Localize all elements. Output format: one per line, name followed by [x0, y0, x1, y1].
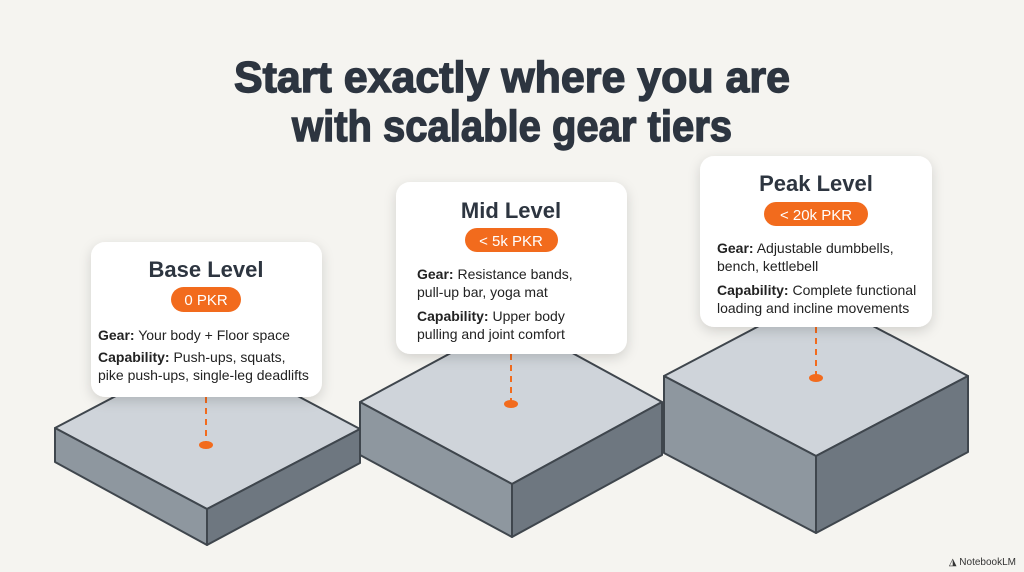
- connector: base: [199, 397, 213, 449]
- connector: mid: [504, 354, 518, 408]
- card: mid level: < 5k PKR: [479, 233, 543, 250]
- card: mid level: Gear: Resistance bands,: [417, 266, 573, 282]
- card: peak level: [700, 156, 932, 327]
- platform: base: [55, 348, 360, 545]
- title: with scalable gear tiers: [291, 102, 732, 151]
- connector: peak: [809, 327, 823, 382]
- card: mid level: Capability: Upper body: [417, 308, 565, 324]
- card: base level: pike push-ups, single-leg deadlifts: [98, 367, 309, 383]
- card: peak level: < 20k PKR: [780, 207, 852, 224]
- card: peak level: Capability: Complete functional: [717, 282, 916, 298]
- card: peak level: Gear: Adjustable dumbbells,: [717, 240, 894, 256]
- card: peak level: Peak Level: [759, 171, 873, 196]
- title: [234, 53, 790, 151]
- platform: mid: [360, 320, 662, 537]
- card: peak level: bench, kettlebell: [717, 258, 818, 274]
- card: base level: Gear: Your body + Floor space: [98, 327, 290, 343]
- card: peak level: loading and incline movements: [717, 300, 909, 316]
- title: Start exactly where you are: [234, 53, 790, 102]
- platform: peak: [664, 296, 968, 533]
- watermark: ◮ NotebookLM: [949, 557, 1016, 568]
- card: base level: Base Level: [149, 257, 263, 282]
- card: mid level: pull-up bar, yoga mat: [417, 284, 548, 300]
- card: mid level: Mid Level: [461, 198, 561, 223]
- card: base level: 0 PKR: [184, 292, 228, 309]
- card: base level: [91, 242, 322, 397]
- card: base level: Capability: Push-ups, squats,: [98, 349, 286, 365]
- card: mid level: pulling and joint comfort: [417, 326, 565, 342]
- card: mid level: [396, 182, 627, 354]
